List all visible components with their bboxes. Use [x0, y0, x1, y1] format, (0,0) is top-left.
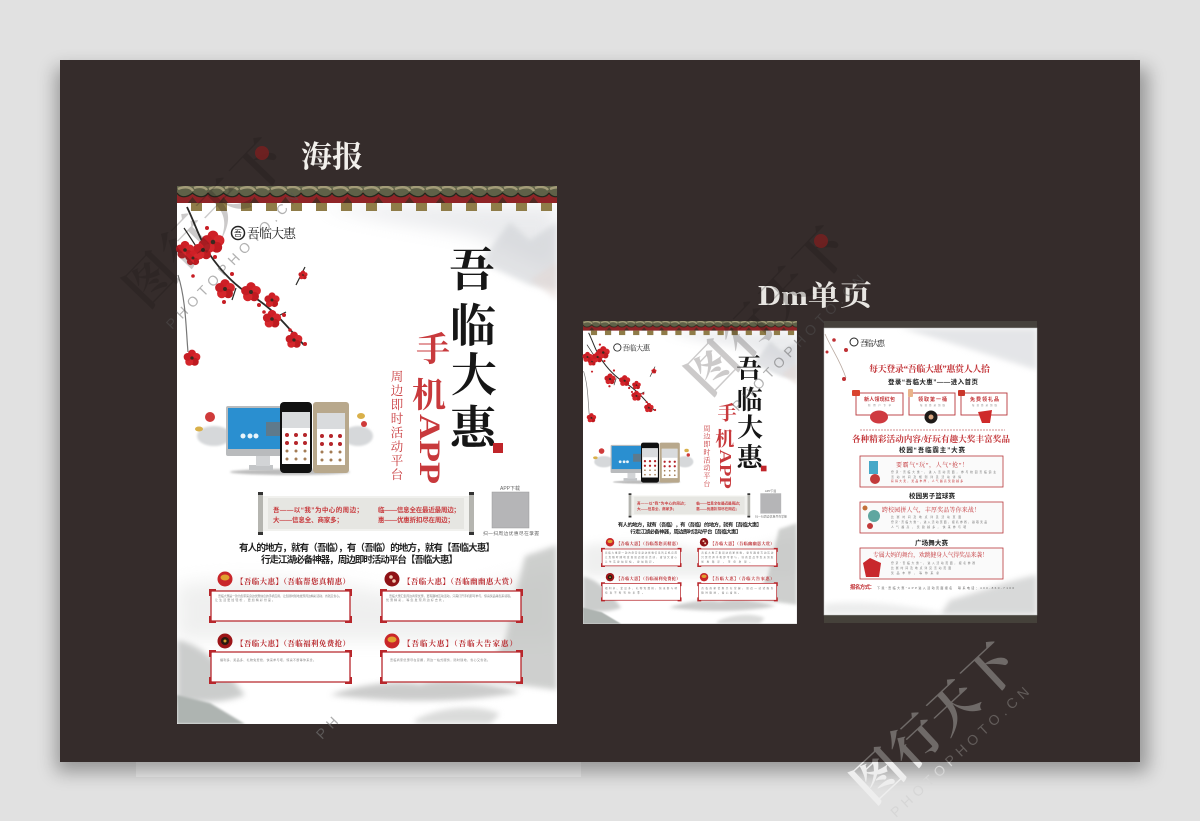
feature 1: 【吾临大惠】（吾临帮您真精惠） — [236, 576, 350, 586]
QR placeholder: APP下载 — [500, 485, 520, 492]
feature 3: 福利多、奖品多、礼物免费抢，快来参与吧，惊喜不断等你来拿。 — [220, 657, 316, 662]
vertical tagline: 时 — [391, 411, 404, 426]
vertical tagline: 周 — [391, 370, 403, 384]
DM features — [601, 538, 778, 601]
event box 3: 奖品丰厚，等你来拿 — [891, 571, 939, 575]
DM tagline: 边 — [703, 432, 710, 441]
watermark: bottom right: PHOTOPHOTO.CN — [887, 680, 1036, 820]
DM back subhead 1: 登录“吾临大惠”——进入首页 — [888, 377, 978, 386]
DM features: 【吾临大惠】（吾临帮您真精惠） — [616, 540, 680, 547]
logo: 吾临大惠 — [247, 226, 297, 241]
feature 2: 优惠精彩，等您发现周边好去处。 — [386, 597, 446, 602]
DM features: 惊喜不断等你来拿。 — [605, 590, 644, 594]
DM roof tiles — [583, 321, 797, 335]
DM subtitle: 手 — [718, 403, 737, 425]
DM slogan: 有人的地方，就有（吾临），有（吾临）的地方，就有【吾临大惠】 — [618, 520, 762, 528]
panel: DM front — [582, 321, 797, 624]
watermark: bottom right: 图行天下 — [841, 634, 1029, 814]
DM QR — [755, 489, 787, 518]
event box 3: 比赛时间及地点详见活动页面 — [891, 566, 951, 570]
DM features: 吾临商家优惠尽在掌握，周边一站式服务 — [701, 586, 774, 590]
DM back reward boxes: 每日登录领取 — [920, 403, 945, 407]
watermark: lower poster: PH — [313, 710, 345, 742]
feature 3: 【吾临大惠】（吾临福利免费抢） — [236, 638, 350, 648]
vertical tagline — [391, 370, 404, 482]
DM back reward boxes: 免费领礼品 — [970, 396, 999, 403]
contact line: 报名方式： — [850, 583, 875, 591]
watermark: top left: 图行天下 — [114, 129, 298, 318]
DM title: 惠 — [737, 443, 766, 472]
DM tagline: 活 — [703, 455, 710, 464]
panel shadow — [56, 68, 1148, 772]
panel: dark backdrop — [60, 60, 1140, 762]
DM tagline — [703, 425, 710, 488]
watermark: bottom right: 图行天下 — [841, 634, 1029, 814]
DM features: 【吾临大惠】（吾临幽幽惠大赏） — [710, 540, 774, 547]
scroll: 临——信息全在最近最周边； — [378, 505, 460, 514]
subtitle: mobile app: 手 — [416, 331, 450, 369]
DM tagline: 时 — [703, 447, 710, 456]
feature 1 — [209, 572, 352, 623]
DM back ink wash — [824, 328, 1037, 615]
watermark: bottom right: PHOTOPHOTO.CN — [887, 680, 1036, 820]
vertical tagline: 动 — [391, 439, 404, 454]
title: 大 — [451, 350, 497, 401]
scroll — [258, 492, 474, 535]
reflection strip under panel — [136, 762, 581, 777]
DM features: 【吾临大惠】（吾临大告家惠） — [710, 575, 774, 582]
subtitle: mobile app: APP — [413, 414, 446, 484]
subtitle: mobile app: 机 — [412, 377, 446, 415]
heading: DM page label: Dm单页 — [758, 280, 872, 312]
devices — [195, 402, 373, 475]
feature 4: 【吾临大惠】（吾临大告家惠） — [403, 638, 517, 648]
DM features: 【吾临大惠】（吾临福利免费抢） — [616, 575, 680, 582]
DM features: 只需打开手机即可参与，惊喜奖品等您来领取 — [701, 555, 774, 559]
DM features: 吾临大惠汇集周边商家优惠，更有趣味互动活动 — [701, 551, 774, 555]
DM scroll: 惠——优惠折扣尽在周边； — [696, 506, 739, 511]
DM back heading 2: 各种精彩活动内容/好玩有趣大奖丰富奖品 — [852, 434, 1010, 444]
DM back heading 1: 每天登录“吾临大惠”惠赏人人拾 — [869, 363, 990, 374]
DM back reward boxes: 每日登录领取 — [972, 403, 997, 407]
event box 1: 要霸气“玩”，人气“抢”！ — [896, 461, 968, 469]
vertical tagline: 边 — [391, 383, 404, 398]
page bottom edge — [0, 821, 1200, 822]
plum branch — [176, 207, 308, 366]
title: 惠 — [450, 403, 500, 454]
DM features: 让您随时随地发现周边精彩活动，省钱又省心 — [605, 555, 678, 559]
DM features: 让生活更加轻松，更加精彩。 — [605, 560, 656, 564]
event box 2: 跨校园拼人气，丰厚奖品等你来战！ — [882, 506, 980, 514]
DM title: 吾 — [736, 354, 762, 383]
event box 2: 登录“吾临大惠”，进入活动页面，报名参赛，赢取奖品 — [891, 520, 987, 524]
scroll: 惠——优惠折扣尽在周边； — [378, 515, 454, 524]
feature 4 — [380, 634, 523, 684]
DM back reward boxes — [852, 389, 1007, 424]
vertical tagline: 活 — [391, 426, 404, 440]
contact line: 下载“吾临大惠”APP进入活动页面报名 联系电话：400-860-7100 — [877, 585, 1014, 590]
DM back plum sprig — [825, 334, 848, 381]
DM back roof and base edges — [824, 321, 1037, 328]
feature 2: 【吾临大惠】（吾临幽幽惠大赏） — [403, 576, 517, 586]
panel: poster — [176, 186, 557, 724]
DM scroll: 吾——以“我”为中心的周边； — [637, 501, 688, 506]
event box 2: 人气越高，奖励越多，快来参与吧 — [891, 525, 966, 529]
feature 4: 吾临商家优惠尽在掌握，周边一站式服务，随时随地，省心又省钱。 — [390, 657, 490, 662]
DM back reward boxes: 领取第一桶 — [918, 396, 947, 403]
watermark: top left: PHOTOPHOTO.CN — [163, 186, 305, 332]
DM subtitle: APP — [716, 449, 735, 489]
event box 3 — [860, 548, 1003, 579]
event box 3: 登录“吾临大惠”，进入活动页面，报名参赛 — [891, 561, 975, 565]
DM back logo: 吾临大惠 — [860, 338, 886, 348]
DM plum branch — [582, 333, 657, 422]
DM tagline: 即 — [703, 441, 710, 449]
DM tagline: 周 — [703, 425, 710, 433]
DM back event title 1: 校园“吾临霸主”大赛 — [899, 445, 966, 454]
event box 1 — [860, 456, 1003, 487]
DM subtitle — [715, 403, 737, 489]
DM scroll: 大——信息全、商家多； — [637, 506, 676, 511]
feature 2: 吾临大惠汇集周边商家优惠，更有趣味互动活动，只需打开手机即可参与，惊喜奖品等您来领取。 — [389, 593, 513, 598]
DM scroll — [629, 493, 750, 517]
DM slogan: 行走江湖必备神器，周边即时活动平台【吾临大惠】 — [630, 527, 741, 535]
event box 3: 专属大妈的舞台，欢跳健身人气得奖品来袭！ — [873, 551, 988, 559]
logo: 吾 — [234, 229, 242, 238]
DM title — [736, 354, 767, 472]
roof tiles — [177, 186, 557, 211]
DM back event title 3: 广场舞大赛 — [915, 538, 948, 547]
scroll: 大——信息全、商家多； — [273, 515, 343, 524]
DM features: 随时随地，省心省钱。 — [701, 590, 741, 594]
heading: poster label: 海报 — [301, 140, 363, 174]
QR placeholder — [483, 485, 539, 537]
DM tagline: 动 — [703, 463, 710, 472]
scroll: 吾——以“我”为中心的周边； — [273, 505, 363, 514]
watermark: centre: PHOTOPHOTO.CN — [729, 268, 871, 414]
vertical tagline: 平 — [391, 454, 403, 468]
DM back reward boxes: 新人领现红包 — [864, 396, 895, 403]
DM QR: APP下载 — [765, 489, 776, 493]
contact line — [850, 583, 1014, 591]
event box 1: 活动时间及规则详见活动详情 — [891, 475, 961, 479]
slogan: 行走江湖必备神器，周边即时活动平台【吾临大惠】 — [261, 554, 458, 566]
vertical tagline: 台 — [391, 468, 404, 482]
event box 2: 比赛时间及地点详见活动页面 — [891, 515, 961, 519]
subtitle: mobile app — [412, 331, 450, 484]
vertical tagline: 即 — [391, 398, 403, 412]
DM tagline: 平 — [703, 472, 710, 480]
DM features: 吾临大惠是一款为您带来身边优惠信息的手机应用 — [605, 551, 678, 555]
DM back event title 2: 校园男子篮球赛 — [909, 491, 956, 500]
event box 2 — [860, 502, 1003, 533]
DM subtitle: 机 — [715, 428, 734, 450]
feature 1: 吾临大惠是一款为您带来身边优惠信息的手机应用，让您随时随地发现周边精彩活动，省钱又省心。 — [218, 593, 342, 598]
DM features: 福利多、奖品多、礼物免费抢，快来参与吧 — [605, 586, 678, 590]
DM logo: 吾临大惠 — [622, 343, 651, 352]
title: 临 — [450, 301, 496, 352]
feature 2 — [380, 572, 523, 623]
feature 1: 让生活更加轻松，更加精彩纷呈。 — [215, 597, 275, 602]
DM tagline: 台 — [703, 479, 710, 488]
DM back reward boxes: 新用户专享 — [868, 403, 891, 407]
DM title: 大 — [737, 413, 763, 442]
divider — [860, 429, 1005, 431]
DM features: 优惠精彩，等您发现。 — [701, 560, 752, 564]
DM scroll: 临——信息全在最近最周边； — [696, 501, 742, 506]
event box 1: 获得大奖，奖品丰厚，人气越高奖励越多 — [891, 479, 963, 483]
slogan — [239, 542, 495, 566]
DM devices — [593, 443, 693, 484]
DM back logo — [850, 338, 886, 348]
DM title: 临 — [737, 386, 763, 415]
title: 吾 — [449, 245, 495, 296]
reward icons — [852, 389, 992, 424]
DM QR: 扫一扫周边优惠尽在掌握 — [755, 514, 787, 518]
watermark: centre: 图行天下 — [676, 217, 860, 406]
DM slogan — [618, 520, 762, 535]
slogan: 有人的地方，就有（吾临），有（吾临）的地方，就有【吾临大惠】 — [239, 542, 495, 554]
event box 1: 登录“吾临大惠”，进入活动页面，参与校园吾临霸主 — [891, 470, 996, 474]
feature 3 — [209, 634, 352, 684]
QR placeholder: 扫一扫周边优惠尽在掌握 — [483, 530, 539, 537]
title — [449, 245, 503, 454]
panel: DM back — [824, 321, 1037, 623]
